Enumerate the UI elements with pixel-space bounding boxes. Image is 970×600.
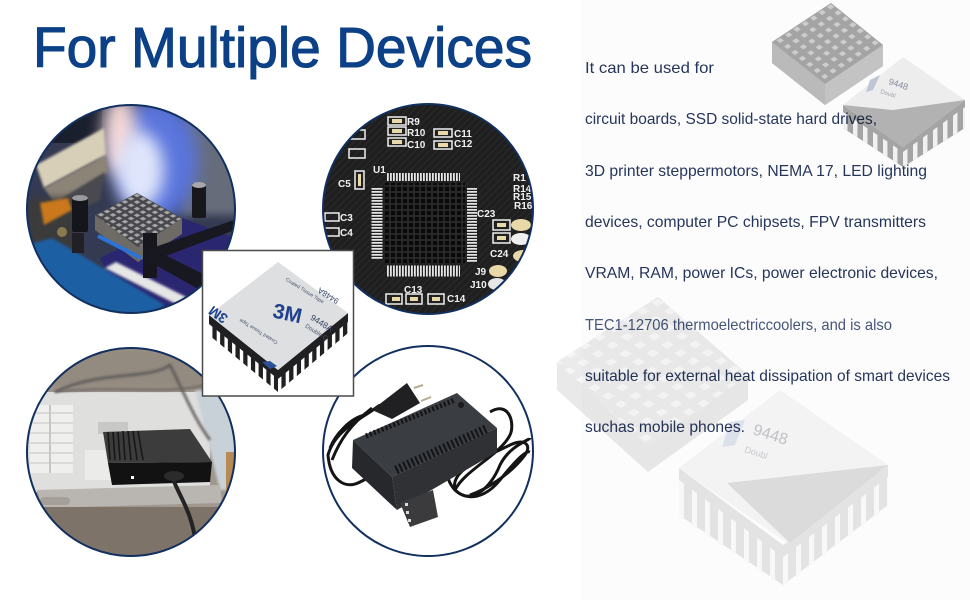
board labels: R15 [513, 192, 532, 203]
top heat sink: bare fins [772, 3, 883, 105]
3M tape markings: Coated Tissue Tape [238, 317, 279, 345]
photo circle: circuit board chip [320, 100, 540, 320]
application text: suchas mobile phones. [585, 419, 745, 436]
board labels: R14 [513, 184, 532, 195]
application text: devices, computer PC chipsets, FPV transmitters [585, 214, 926, 231]
3M tape markings: 3M [271, 300, 304, 328]
3M tape markings: Coated Tissue Tape [284, 277, 325, 305]
title: For Multiple Devices [33, 16, 532, 80]
application text: circuit boards, SSD solid-state hard drives, [585, 111, 877, 128]
board labels: C3 [340, 213, 353, 224]
application text: It can be used for [585, 60, 714, 77]
board labels: R10 [407, 128, 426, 139]
right background panel [582, 0, 970, 600]
board labels: C10 [407, 140, 426, 151]
3M tape markings [205, 277, 341, 369]
board labels: C13 [404, 285, 423, 296]
bottom heat sink: bare fins, faded [557, 297, 748, 472]
photo circle: laptop with external drive [20, 348, 240, 557]
board labels: C14 [447, 294, 466, 305]
3M tape markings: 9448A [316, 285, 341, 306]
board labels: C11 [454, 129, 472, 140]
board labels: R9 [407, 117, 420, 128]
photo circle: power adapter [323, 346, 533, 556]
board labels: C23 [477, 209, 496, 220]
application text: TEC1-12706 thermoelectriccoolers, and is also [585, 317, 892, 334]
application text: suitable for external heat dissipation of smart devices [585, 368, 950, 385]
product box: black heat sink with 3M tape [202, 250, 354, 396]
board labels: C4 [340, 228, 353, 239]
board labels: J9 [475, 267, 487, 278]
bottom heat sink: peeled tape, faded [679, 390, 888, 587]
board labels: U1 [373, 165, 386, 176]
adapter body [352, 393, 497, 510]
application text: VRAM, RAM, power ICs, power electronic devices, [585, 265, 938, 282]
top heat sink: peeled tape: 9448 [887, 76, 910, 92]
board labels: C12 [454, 139, 473, 150]
component footprints [325, 117, 510, 304]
bottom heat sink: peeled tape, faded: Doubl [743, 444, 769, 461]
photo circle: motherboard heat sink with flame [27, 95, 240, 325]
top heat sink: peeled tape: Doubl [879, 89, 896, 100]
board labels: J10 [470, 280, 487, 291]
board labels: C5 [338, 179, 351, 190]
board labels: R16 [514, 201, 533, 212]
top heat sink: peeled tape [843, 57, 965, 167]
application text [585, 60, 950, 436]
adapter cables [328, 405, 530, 497]
board labels [338, 117, 533, 305]
adapter plug [372, 383, 431, 419]
3M tape markings: 9448A [309, 312, 335, 334]
board labels: R1 [513, 173, 526, 184]
adapter connector [400, 490, 438, 527]
board labels: C24 [490, 249, 509, 260]
solder pads [358, 119, 533, 301]
3M tape markings: Double C [304, 324, 329, 342]
3M tape markings: 3M [205, 303, 231, 327]
bottom heat sink: peeled tape, faded: 9448 [751, 422, 790, 449]
application text: 3D printer steppermotors, NEMA 17, LED lighting [585, 163, 927, 180]
chip heat sink with pins [377, 177, 472, 271]
